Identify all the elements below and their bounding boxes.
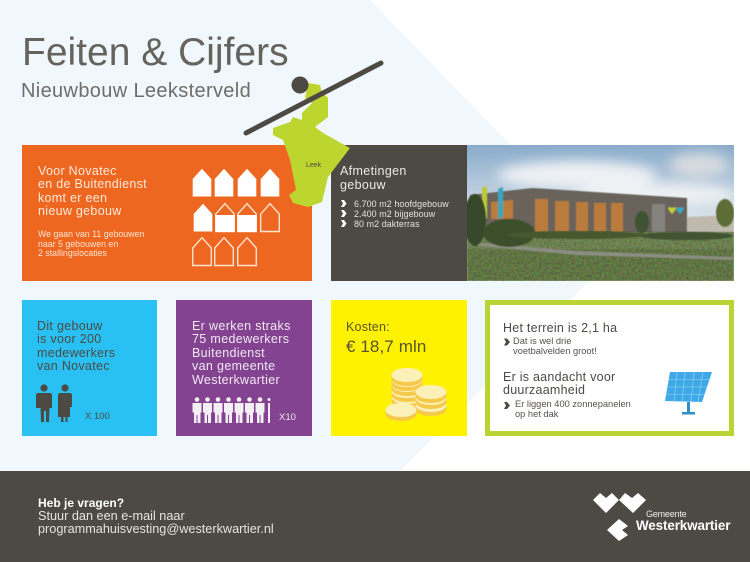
panel heading: [38, 164, 147, 218]
logo name: Westerkwartier: [636, 518, 730, 533]
icon: bullets: [504, 338, 510, 409]
logo: Gemeente Westerkwartier: [593, 493, 730, 541]
terrain note: [513, 336, 597, 356]
panel text: [37, 319, 115, 373]
icon: houses: [192, 168, 280, 266]
multiplier: X 100: [85, 411, 110, 422]
terrain heading: Het terrein is 2,1 ha: [503, 321, 617, 335]
dimensions heading: Afmetingen: [340, 164, 407, 178]
panel text: Westerkwartier: [192, 373, 280, 387]
icon: coins: [386, 368, 446, 421]
pin head: [292, 76, 308, 94]
multiplier: X10: [279, 412, 296, 423]
contact text: Stuur dan een e-mail naar: [38, 509, 185, 523]
panel heading: Voor Novatec: [38, 164, 117, 178]
panel text: is voor 200: [37, 332, 101, 346]
sustainability note: [515, 399, 631, 419]
panel text: Dit gebouw: [37, 319, 103, 333]
subtitle: Nieuwbouw Leeksterveld: [21, 80, 251, 102]
panel text: medewerkers: [37, 346, 115, 360]
panel text: [192, 319, 291, 387]
logo mark: [593, 493, 646, 541]
panel text: 75 medewerkers: [192, 332, 289, 346]
panel: employees Buitendienst: [176, 300, 312, 436]
sustainability heading: [503, 370, 615, 397]
sustainability note: op het dak: [515, 409, 558, 419]
panel note: 2 stallingslocaties: [38, 248, 107, 258]
panel: terrain and sustainability: [485, 300, 734, 436]
panel text: Er werken straks: [192, 319, 291, 333]
sustainability heading: Er is aandacht voor: [503, 370, 615, 384]
title: Feiten & Cijfers: [22, 31, 289, 74]
panel note: We gaan van 11 gebouwen: [38, 229, 144, 239]
panel text: Buitendienst: [192, 346, 265, 360]
contact text: [38, 496, 274, 536]
contact text: programmahuisvesting@westerkwartier.nl: [38, 522, 274, 536]
ground texture: [467, 232, 734, 281]
icon: two people: [36, 384, 72, 422]
panel: employees Novatec: [22, 300, 157, 436]
panel heading: nieuw gebouw: [38, 204, 122, 218]
logo small line: Gemeente: [646, 509, 686, 519]
terrain note: voetbalvelden groot!: [513, 346, 597, 356]
panel text: van gemeente: [192, 359, 275, 373]
dimensions list: 6.700 m2 hoofdgebouw: [354, 199, 449, 209]
panel heading: komt er een: [38, 191, 107, 205]
contact text: Heb je vragen?: [38, 496, 124, 510]
map shape: [273, 83, 350, 207]
panel: building dimensions: [331, 145, 467, 281]
panel heading: en de Buitendienst: [38, 177, 147, 191]
dimensions heading: [340, 164, 407, 192]
icon: people row: [192, 397, 270, 423]
costs label: Kosten:: [346, 320, 390, 334]
panel: costs: [331, 300, 467, 436]
photo: building render: [467, 145, 734, 281]
pin bar: [246, 63, 381, 133]
panel note: [38, 229, 144, 258]
footer: [0, 471, 750, 562]
sustainability heading: duurzaamheid: [503, 383, 585, 397]
map label: Leek: [306, 162, 322, 169]
icon: solar panel: [665, 372, 712, 414]
costs amount: € 18,7 mln: [346, 337, 426, 356]
panel note: naar 5 gebouwen en: [38, 239, 118, 249]
dimensions list: 2.400 m2 bijgebouw: [354, 209, 435, 219]
sustainability note: Er liggen 400 zonnepanelen: [515, 399, 631, 409]
dimensions list: [354, 199, 449, 229]
dimensions list: 80 m2 dakterras: [354, 219, 420, 229]
panel: new building: [22, 145, 312, 281]
dimensions heading: gebouw: [340, 178, 386, 192]
panel text: van Novatec: [37, 359, 110, 373]
icon: bullets: [341, 200, 346, 227]
terrain note: Dat is wel drie: [513, 336, 571, 346]
